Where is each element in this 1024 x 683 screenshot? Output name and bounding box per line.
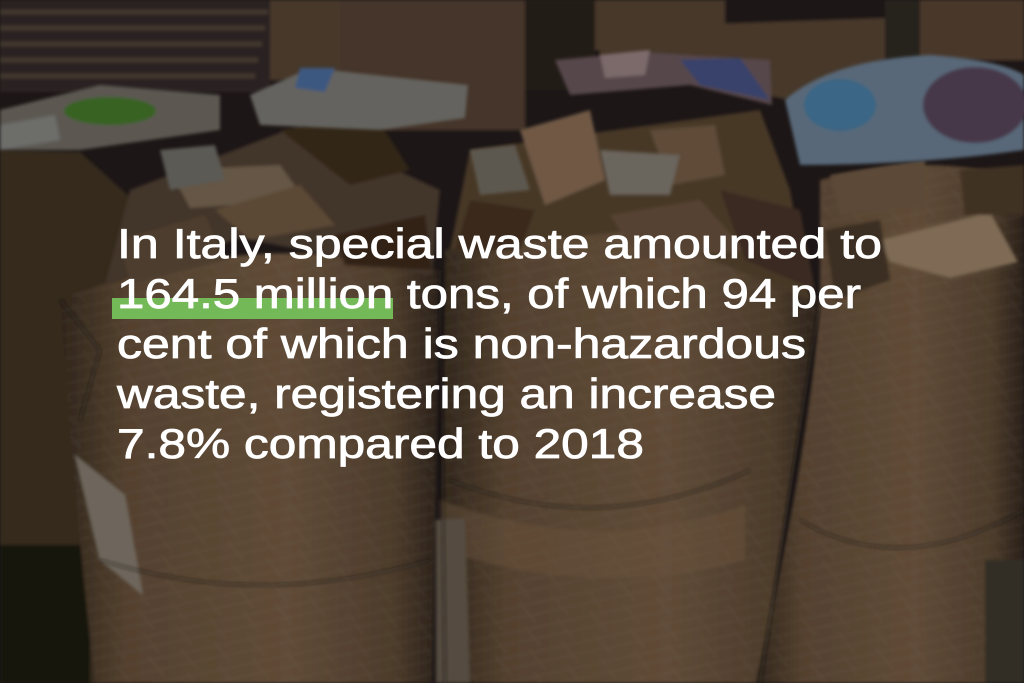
background photo: crease and wrap detail: [60, 270, 1024, 683]
background photo: crumpled cardboard tops: [105, 110, 1024, 300]
highlight behind 164.5 million: [112, 298, 393, 319]
headline text: [116, 220, 882, 467]
headline text: 7.8% compared to 2018: [117, 420, 644, 467]
headline text: cent of which is non-hazardous: [117, 320, 806, 367]
background photo: paper scraps and plastic waste: [0, 50, 1024, 195]
background photo: cardboard bales: [0, 150, 1024, 683]
headline text: waste, registering an increase: [116, 370, 776, 417]
headline text: 164.5 million tons, of which 94 per: [117, 270, 861, 317]
headline text: In Italy, special waste amounted to: [117, 220, 882, 267]
